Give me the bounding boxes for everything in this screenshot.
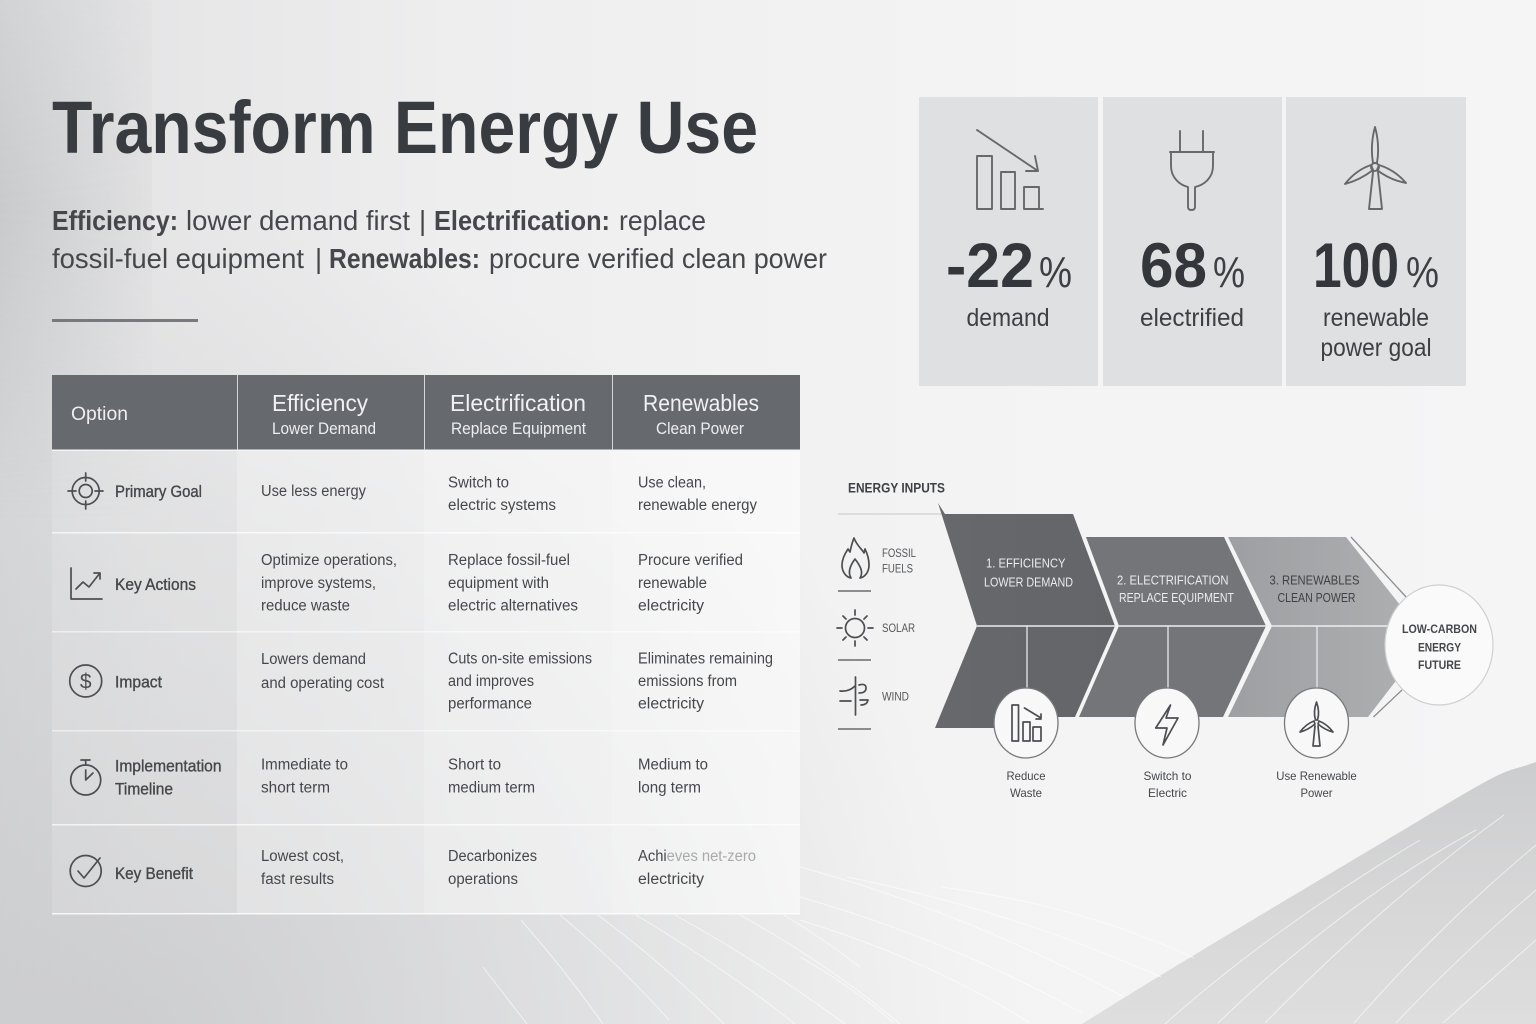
icon: plug [1170,131,1214,210]
stat panel: demand [919,97,1098,386]
icon: wind [840,677,868,715]
energy inputs column: FUELS [882,564,913,576]
chevron 2: electrification: 2. ELECTRIFICATION [1117,574,1228,588]
icon: check circle [70,856,101,886]
stat panel: electrified: electrified [1140,304,1244,332]
subtitle: | [419,205,426,236]
step labels: Use Renewable [1276,769,1357,783]
outcome circle: LOW-CARBON [1402,622,1477,636]
step labels: Electric [1148,786,1187,800]
row: key actions: improve systems, [261,575,376,592]
stat panel: demand: % [1039,248,1072,297]
table header: Option [71,403,128,425]
icon: target [68,473,103,509]
row: implementation timeline [71,756,708,798]
row: key benefit: electricity [638,871,704,888]
chevron 2: electrification: REPLACE EQUIPMENT [1119,591,1234,605]
table header: Clean Power [656,420,744,438]
step circle: use renewable power [1284,688,1348,758]
row: implementation timeline: short term [261,780,330,796]
step labels [1006,769,1357,800]
chevron 3: renewables [1228,537,1412,717]
row: impact: Lowers demand [261,651,366,668]
step labels: Switch to [1144,769,1192,783]
subtitle: Efficiency: [52,205,178,236]
stat panel: renewable power goal: power goal [1320,334,1432,362]
row: impact: emissions from [638,673,737,690]
energy inputs column [837,481,945,729]
energy inputs column: SOLAR [882,623,915,635]
stat panel: electrified [1103,97,1282,386]
row: key actions [71,552,743,614]
step circle: switch to electric [1135,688,1199,758]
outcome circle [1385,585,1493,705]
row: primary goal [68,473,757,514]
row: key benefit: Decarbonizes [448,848,537,865]
subtitle: replace [619,205,706,236]
icon: sun [837,610,873,646]
step circle: reduce waste [994,688,1058,758]
icon: dollar coin: $ [80,670,92,694]
chevron 2: electrification [1079,537,1266,717]
row: impact: Cuts on-site emissions [448,650,592,668]
row: key actions: Key Actions [115,576,196,594]
divider rule [52,319,198,322]
chevron 3: renewables: CLEAN POWER [1278,591,1356,605]
table header: Electrification [450,390,586,416]
table header: Replace Equipment [451,420,586,438]
row: key benefit: Key Benefit [115,865,193,883]
table body cells [52,450,800,914]
row: key benefit: operations [448,871,518,888]
row: primary goal: Switch to [448,474,509,492]
row: key benefit: Lowest cost, [261,848,344,865]
table header: Renewables [643,390,759,416]
subtitle: fossil-fuel equipment [52,243,304,274]
icon: falling bars [977,130,1043,209]
step labels: Waste [1010,786,1042,800]
row: key benefit: Achieves net-zero [638,848,756,865]
stat panel: electrified: 68 [1140,231,1207,301]
row: key actions: renewable [638,575,707,592]
stat panel: renewable power goal: 100 [1313,231,1399,301]
subtitle: lower demand first [186,205,410,236]
icon: wind turbine [1345,127,1406,209]
row: primary goal: electric systems [448,497,556,514]
row: implementation timeline: Medium to [638,756,708,774]
row: impact: and improves [448,673,534,690]
stat panel: renewable power goal: renewable [1323,304,1429,332]
stat panel: demand: demand [966,304,1050,332]
chevron 1: efficiency: 1. EFFICIENCY [986,557,1066,571]
step labels: Reduce [1006,769,1046,783]
chevron 1: efficiency [935,503,1115,728]
outcome circle: FUTURE [1418,658,1461,672]
comparison table [52,375,800,914]
subtitle: Renewables: [329,243,480,274]
row: impact: Eliminates remaining [638,650,773,668]
row: primary goal: Primary Goal [115,483,202,501]
row: key actions: electric alternatives [448,598,578,614]
row: implementation timeline: Short to [448,756,501,774]
energy inputs column: FOSSIL [882,548,916,560]
energy inputs column: WIND [882,692,909,704]
table header [52,375,800,451]
stat panel: renewable power goal: % [1406,248,1439,297]
row: impact: Impact [115,674,162,692]
subtitle [52,205,827,274]
energy inputs column: ENERGY INPUTS [848,481,945,496]
row: key actions: Procure verified [638,552,743,569]
row: primary goal: Use clean, [638,474,706,492]
subtitle: | [315,243,322,274]
subtitle: procure verified clean power [489,243,827,274]
table header: Efficiency [272,390,368,416]
row: impact [70,650,773,712]
subtitle: Electrification: [434,205,610,236]
row: impact: and operating cost [261,675,385,692]
row: key actions: electricity [638,598,704,614]
row: implementation timeline: Timeline [115,780,173,798]
step labels: Power [1300,786,1333,800]
row: key benefit: fast results [261,871,334,888]
row: key actions: equipment with [448,575,549,592]
row: key actions: reduce waste [261,598,350,614]
stat panel: electrified: % [1213,248,1245,297]
outcome circle: ENERGY [1418,640,1461,654]
table header: Lower Demand [272,420,376,438]
row: key actions: Optimize operations, [261,552,397,569]
icon: stopwatch [71,760,101,795]
row: implementation timeline: Implementation [115,758,222,776]
process chevrons [935,503,1493,800]
stat panel: demand: -22 [946,231,1034,301]
icon: rising chart [71,568,102,599]
chevron 3: renewables: 3. RENEWABLES [1270,574,1360,588]
title: Transform Energy Use [52,86,758,169]
row: primary goal: renewable energy [638,497,757,514]
row: primary goal: Use less energy [261,483,366,500]
row: implementation timeline: Immediate to [261,756,348,774]
row: implementation timeline: long term [638,780,701,796]
row: key actions: Replace fossil-fuel [448,552,570,569]
stat panel: renewable power goal [1286,97,1466,386]
row: implementation timeline: medium term [448,780,535,796]
chevron 1: efficiency: LOWER DEMAND [984,576,1073,590]
row: key benefit [70,848,756,888]
row: impact: electricity [638,696,704,712]
row: impact: performance [448,696,532,712]
icon: flame [842,538,869,578]
icon: dollar coin [70,665,102,697]
